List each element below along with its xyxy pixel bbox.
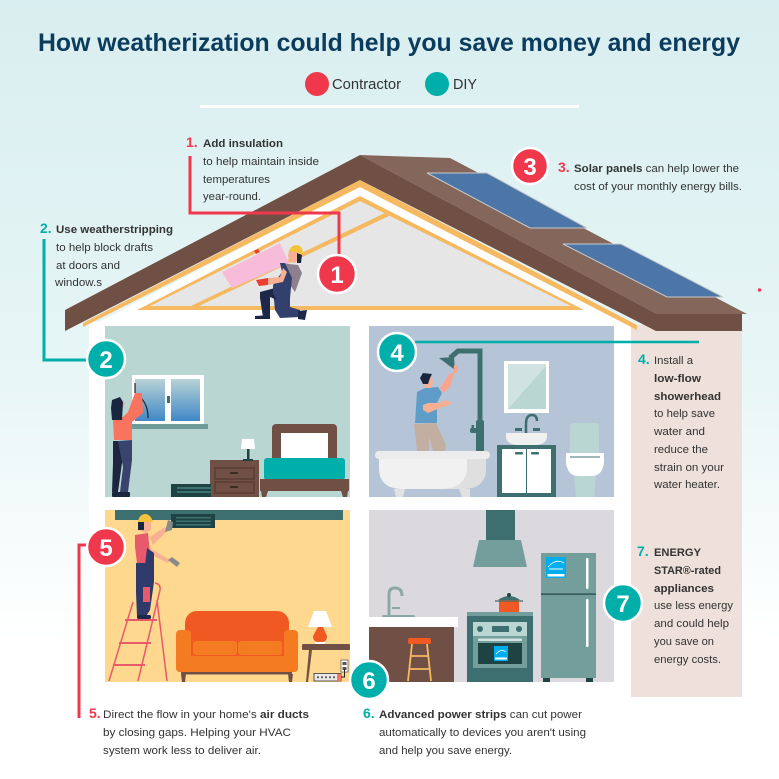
red dot	[758, 288, 761, 292]
mirror	[504, 361, 549, 413]
text: weatherstripping: window.s	[54, 277, 102, 289]
legend: DIY	[453, 76, 477, 93]
text: add insulation	[186, 134, 319, 203]
window	[130, 375, 208, 429]
text: showerhead: showerhead	[654, 391, 721, 403]
text: energy star: ENERGY	[654, 547, 701, 559]
pot	[495, 593, 523, 612]
text: showerhead: low-flow	[654, 373, 701, 385]
text: energy star: you save on	[654, 636, 714, 648]
text: power strips: Advanced power strips can cut power	[379, 709, 582, 721]
solar panels	[427, 173, 723, 297]
roof	[65, 155, 747, 331]
text: energy star: 7.	[637, 543, 649, 559]
oven	[467, 612, 533, 682]
text: solar panels: Solar panels can help lower the	[574, 163, 739, 175]
shower	[439, 351, 484, 452]
text: energy star: energy costs.	[654, 654, 721, 666]
badge 6: 6	[362, 668, 376, 695]
text: power strips: automatically to devices you aren't using	[379, 727, 586, 739]
text: showerhead	[638, 351, 724, 491]
badge 5	[87, 528, 125, 566]
text: solar panels: 3.	[558, 159, 570, 175]
room: bedroom	[105, 326, 350, 497]
text: add insulation: year-round.	[203, 191, 261, 203]
text: energy star: STAR®-rated	[654, 565, 721, 577]
text: air ducts	[89, 705, 309, 757]
text: weatherstripping: to help block drafts	[56, 242, 153, 254]
power strip and outlet	[314, 660, 348, 681]
air duct	[115, 510, 343, 528]
room: kitchen	[369, 510, 614, 682]
text: add insulation: Add insulation	[203, 138, 283, 150]
text: weatherstripping: 2.	[40, 220, 52, 236]
text: showerhead: water heater.	[653, 479, 720, 491]
badge 4: 4	[390, 340, 404, 367]
counter and faucet	[369, 588, 458, 682]
legend	[305, 72, 477, 96]
floor vent	[171, 484, 211, 497]
text: showerhead: 4.	[638, 351, 650, 367]
sink and cabinet	[497, 415, 556, 497]
badge 3	[512, 148, 548, 184]
text: air ducts: 5.	[89, 705, 101, 721]
badge 2	[87, 340, 125, 378]
stool	[408, 638, 431, 681]
text: add insulation: 1.	[186, 134, 198, 150]
refrigerator	[541, 553, 596, 682]
attic worker with insulation	[222, 243, 307, 320]
text: solar panels: cost of your monthly energy bills.	[574, 181, 742, 193]
text: air ducts: Direct the flow in your home's air ducts	[103, 709, 309, 721]
text: weatherstripping: Use weatherstripping	[56, 224, 173, 236]
callout line 4	[415, 341, 699, 343]
house wall	[89, 322, 631, 697]
badge 7: 7	[616, 591, 630, 618]
badge 6	[350, 661, 388, 699]
man with showerhead	[414, 365, 458, 451]
badge 5: 5	[99, 535, 113, 562]
text: power strips: and help you save energy.	[379, 745, 512, 757]
sofa	[176, 611, 298, 682]
badge 2: 2	[99, 347, 113, 374]
text: power strips: 6.	[363, 705, 375, 721]
energy star label on fridge	[546, 557, 566, 578]
room: bathroom	[369, 326, 614, 497]
right side text panel	[631, 325, 742, 697]
side table	[302, 644, 350, 682]
ladder	[109, 583, 167, 681]
callout line 2	[44, 239, 88, 360]
badge 1: 1	[330, 262, 344, 289]
text: showerhead: Install a	[654, 355, 694, 367]
legend: Contractor	[332, 76, 401, 93]
woman weatherstripping	[111, 393, 143, 497]
contractor on ladder	[135, 514, 180, 619]
text: energy star	[637, 543, 733, 666]
badge 3: 3	[523, 154, 537, 181]
text: air ducts: system work less to deliver air.	[103, 745, 261, 757]
text: power strips	[363, 705, 586, 757]
text: weatherstripping	[40, 220, 173, 289]
text: showerhead: to help save	[654, 408, 715, 420]
text: solar panels	[558, 159, 742, 193]
toilet	[566, 423, 604, 497]
text: energy star: use less energy	[654, 600, 733, 612]
callout line 1	[190, 156, 339, 256]
energy star label on oven	[494, 646, 508, 661]
range hood	[473, 510, 527, 567]
bathtub	[375, 451, 490, 497]
text: weatherstripping: at doors and	[56, 260, 120, 272]
bed	[260, 424, 349, 497]
badge 1	[318, 255, 356, 293]
text: showerhead: water and	[653, 426, 705, 438]
text: add insulation: to help maintain inside	[203, 156, 319, 168]
room: living room	[105, 510, 350, 682]
badge 4	[378, 333, 416, 371]
text: energy star: and could help	[654, 618, 729, 630]
text: add insulation: temperatures	[203, 174, 270, 186]
nightstand	[210, 460, 259, 497]
text: showerhead: reduce the	[654, 444, 708, 456]
text: air ducts: by closing gaps. Helping your HVAC	[103, 727, 291, 739]
badge 7	[604, 584, 642, 622]
text: showerhead: strain on your	[654, 462, 724, 474]
callout line 5	[79, 545, 88, 718]
table lamp	[308, 611, 332, 644]
text: energy star: appliances	[654, 583, 714, 595]
bedside lamp	[241, 439, 255, 461]
title: How weatherization could help you save money and energy	[38, 29, 740, 57]
